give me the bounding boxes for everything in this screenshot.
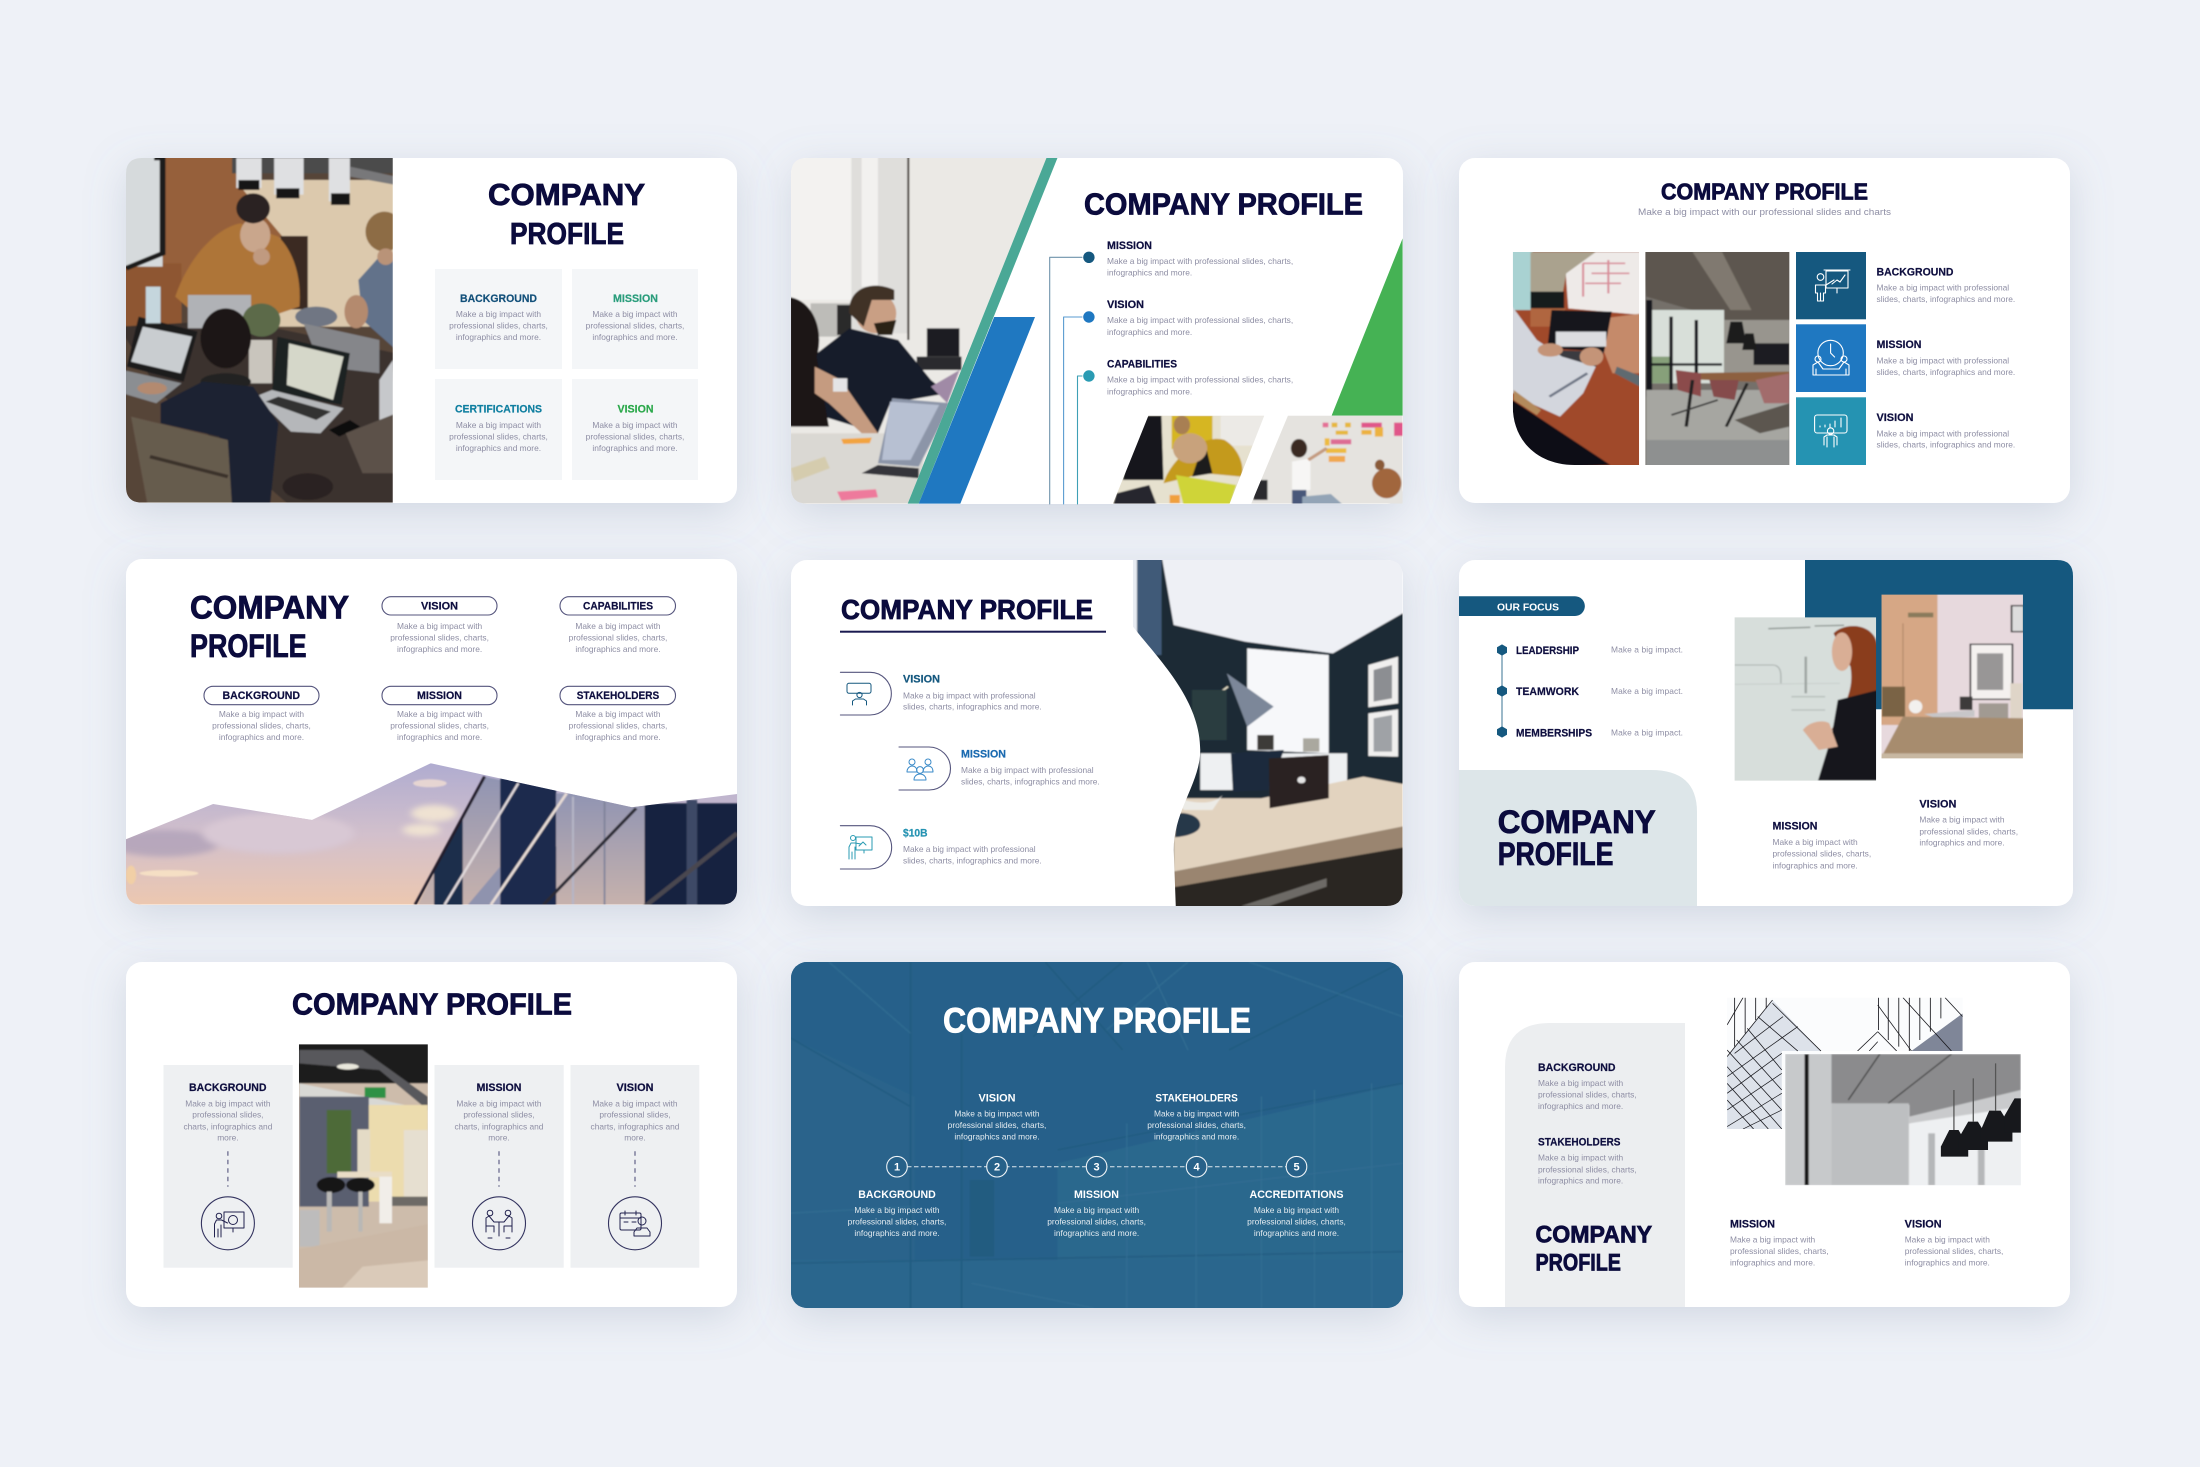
photo: laptop at whiteboard xyxy=(1512,252,1639,465)
item: vision: slides, charts, infographics and more. xyxy=(1876,440,2015,450)
title: PROFILE xyxy=(1536,1249,1621,1276)
photo: office lobby xyxy=(295,1040,432,1293)
title: PROFILE xyxy=(510,216,624,251)
item: vision xyxy=(948,1092,1046,1142)
title xyxy=(190,589,349,664)
item: vision: Make a big impact with xyxy=(1919,815,2005,825)
item: mission: Make a big impact with xyxy=(1054,1205,1140,1215)
box: vision: Make a big impact with xyxy=(592,420,678,430)
item: vision: VISION xyxy=(978,1092,1016,1104)
dashed timeline with numbered nodes: 3 xyxy=(1094,1162,1100,1174)
column: background: professional slides, xyxy=(192,1110,264,1120)
item: mission: Make a big impact with professional xyxy=(1876,355,2009,365)
photo: pendant lamps xyxy=(1781,1050,2025,1190)
column: background xyxy=(164,1065,293,1268)
item: stakeholders: Make a big impact with xyxy=(1538,1153,1624,1163)
box: background: BACKGROUND xyxy=(460,293,537,305)
item: mission: MISSION xyxy=(1074,1189,1119,1201)
item: accreditations: Make a big impact with xyxy=(1254,1205,1339,1215)
photo: woman at whiteboard xyxy=(1734,617,1876,781)
column: mission: charts, infographics and xyxy=(455,1121,544,1131)
item: mission xyxy=(1047,1189,1146,1238)
item: accreditations: infographics and more. xyxy=(1254,1228,1339,1238)
panel: slide 3 icon tiles xyxy=(1459,158,2070,503)
item: background: infographics and more. xyxy=(854,1228,940,1238)
pill: mission xyxy=(382,686,497,742)
photo: desk and poster xyxy=(1878,592,2027,762)
dashed timeline with numbered nodes: 4 xyxy=(1194,1162,1201,1174)
column: background: more. xyxy=(217,1133,239,1143)
title: PROFILE xyxy=(190,628,307,664)
timeline connectors and dots xyxy=(1050,252,1095,504)
item: vision: infographics and more. xyxy=(1919,838,2005,848)
box: certifications: CERTIFICATIONS xyxy=(455,404,542,416)
grey side panel xyxy=(1505,1023,1685,1307)
item: vision: VISION xyxy=(1876,412,1914,424)
pill: capabilities: professional slides, charts, xyxy=(569,633,667,643)
item: stakeholders: Make a big impact with xyxy=(1154,1109,1240,1119)
panel: slide 2 diagonal timeline xyxy=(784,153,1408,510)
item: stakeholders: STAKEHOLDERS xyxy=(1155,1092,1238,1104)
focus timeline: MEMBERSHIPS xyxy=(1516,727,1592,739)
item: vision: infographics and more. xyxy=(1905,1258,1990,1268)
box: certifications: professional slides, charts, xyxy=(449,432,548,442)
title xyxy=(1536,1222,1652,1276)
item: $10B with icon: slides, charts, infographics and more. xyxy=(903,856,1042,866)
pill: vision: Make a big impact with xyxy=(397,621,483,631)
box: certifications: infographics and more. xyxy=(456,443,541,453)
item: background: Make a big impact with professional xyxy=(1876,283,2009,293)
item: vision with icon xyxy=(840,672,1042,715)
column: vision: professional slides, xyxy=(599,1110,671,1120)
column: mission: MISSION xyxy=(476,1082,522,1094)
column: vision: Make a big impact with xyxy=(592,1098,678,1108)
photo and coloured diagonal shapes xyxy=(784,153,1408,510)
item: mission with icon xyxy=(899,747,1100,790)
pill: background: BACKGROUND xyxy=(222,690,300,702)
focus timeline: Make a big impact. xyxy=(1611,644,1683,654)
item: $10B with icon: Make a big impact with professional xyxy=(903,844,1036,854)
item: vision: VISION xyxy=(1919,798,1957,810)
column: background: charts, infographics and xyxy=(183,1121,273,1131)
item: mission with icon: slides, charts, infographics and more. xyxy=(961,776,1100,786)
light title panel xyxy=(1459,770,1697,906)
item: capabilities xyxy=(1107,359,1293,396)
focus timeline: Make a big impact. xyxy=(1611,686,1683,696)
pill: stakeholders: Make a big impact with xyxy=(575,709,661,719)
item: background: professional slides, charts, xyxy=(1538,1090,1637,1100)
item: background xyxy=(848,1189,946,1238)
box: mission: infographics and more. xyxy=(592,332,678,342)
pill: vision: infographics and more. xyxy=(397,644,482,654)
pill: vision: professional slides, charts, xyxy=(390,633,489,643)
background hall photo tint xyxy=(788,960,1408,1310)
focus timeline xyxy=(1497,644,1683,739)
tile: background icon xyxy=(1796,252,1866,319)
item: stakeholders: professional slides, charts, xyxy=(1147,1120,1246,1130)
focus timeline: Make a big impact. xyxy=(1611,727,1683,737)
pill: background: Make a big impact with xyxy=(219,709,304,719)
item: vision xyxy=(1876,412,2015,450)
item: background xyxy=(1876,266,2015,304)
panel: slide 8 blue timeline xyxy=(788,960,1408,1310)
our focus tab xyxy=(1459,596,1585,616)
column: background: BACKGROUND xyxy=(189,1082,267,1094)
item: mission: Make a big impact with xyxy=(1772,837,1858,847)
column: vision: more. xyxy=(624,1133,646,1143)
dark blue block xyxy=(1805,560,2073,709)
pill: mission: MISSION xyxy=(417,690,462,702)
title xyxy=(1498,804,1656,872)
item: accreditations xyxy=(1247,1189,1346,1238)
panel: slide 9 monochrome photos xyxy=(1459,962,2070,1307)
box: mission: Make a big impact with xyxy=(592,309,678,319)
item: mission xyxy=(1107,240,1293,278)
item: mission xyxy=(1876,339,2015,377)
item: mission xyxy=(1772,821,1871,870)
dashed timeline with numbered nodes: 1 xyxy=(894,1162,900,1174)
column: vision xyxy=(570,1065,699,1268)
box: background: Make a big impact with xyxy=(456,309,541,319)
item: background: Make a big impact with xyxy=(854,1205,940,1215)
item: background: infographics and more. xyxy=(1538,1101,1623,1111)
column: mission: more. xyxy=(488,1133,510,1143)
item: vision: VISION xyxy=(1107,299,1144,311)
item: mission: Make a big impact with xyxy=(1730,1235,1816,1245)
item: background: BACKGROUND xyxy=(858,1189,936,1201)
item: capabilities: infographics and more. xyxy=(1107,386,1192,396)
item: mission: professional slides, charts, xyxy=(1047,1217,1146,1227)
item: $10B with icon: $10B xyxy=(903,828,928,840)
photo: team at laptops xyxy=(118,153,403,507)
item: vision: Make a big impact with professional xyxy=(1876,428,2009,438)
photo: meeting room xyxy=(1645,252,1790,465)
pill: vision xyxy=(382,597,497,654)
pill: vision: VISION xyxy=(421,600,458,612)
pill: capabilities: infographics and more. xyxy=(575,644,661,654)
box: vision: VISION xyxy=(618,404,654,416)
item: mission: MISSION xyxy=(1876,339,1922,351)
box: certifications xyxy=(435,379,562,480)
item: vision: professional slides, charts, xyxy=(948,1120,1046,1130)
item: mission: MISSION xyxy=(1772,821,1818,833)
item: mission: infographics and more. xyxy=(1772,860,1858,870)
box: background xyxy=(435,269,562,369)
item: background: slides, charts, infographics and more. xyxy=(1876,294,2015,304)
item: mission: infographics and more. xyxy=(1054,1228,1139,1238)
title underline xyxy=(840,631,1106,633)
dashed timeline with numbered nodes xyxy=(887,1156,1307,1177)
box: vision: professional slides, charts, xyxy=(586,432,684,442)
title: PROFILE xyxy=(1498,836,1613,872)
title: COMPANY PROFILE xyxy=(1084,187,1363,222)
pill: capabilities: Make a big impact with xyxy=(575,621,661,631)
subtitle: Make a big impact with our professional slides and charts xyxy=(1638,207,1891,218)
column: background: Make a big impact with xyxy=(185,1098,271,1108)
item: vision: Make a big impact with xyxy=(1905,1235,1990,1245)
item: vision with icon: slides, charts, infographics and more. xyxy=(903,702,1042,712)
tile: mission icon xyxy=(1796,324,1866,392)
box: certifications: Make a big impact with xyxy=(456,420,541,430)
panel: slide 6 our focus xyxy=(1459,560,2073,906)
column: mission: Make a big impact with xyxy=(456,1098,542,1108)
pill: capabilities xyxy=(560,597,676,654)
title: COMPANY xyxy=(488,177,645,212)
item: background: BACKGROUND xyxy=(1538,1062,1616,1074)
item: accreditations: professional slides, charts, xyxy=(1247,1217,1346,1227)
item: background: Make a big impact with xyxy=(1538,1078,1624,1088)
photo: glass building at sunset xyxy=(110,760,746,910)
our focus tab: OUR FOCUS xyxy=(1497,602,1559,613)
item: mission with icon: Make a big impact with professional xyxy=(961,765,1094,775)
column: vision: charts, infographics and xyxy=(591,1121,680,1131)
pill: stakeholders: infographics and more. xyxy=(575,732,661,742)
focus timeline: TEAMWORK xyxy=(1516,686,1579,698)
item: mission with icon: MISSION xyxy=(961,749,1006,761)
box: mission xyxy=(572,269,698,369)
title xyxy=(488,177,645,251)
dashed timeline with numbered nodes: 5 xyxy=(1293,1162,1300,1174)
item: stakeholders: infographics and more. xyxy=(1154,1132,1239,1142)
item: vision: professional slides, charts, xyxy=(1905,1246,2003,1256)
item: mission: professional slides, charts, xyxy=(1772,849,1871,859)
item: background xyxy=(1538,1062,1637,1111)
item: mission: infographics and more. xyxy=(1107,268,1192,278)
item: background: BACKGROUND xyxy=(1876,266,1954,278)
tile: vision icon xyxy=(1796,397,1866,465)
pill: mission: Make a big impact with xyxy=(397,709,483,719)
pill: background xyxy=(204,686,319,742)
item: capabilities: Make a big impact with professional slides, charts, xyxy=(1107,375,1293,385)
column: mission xyxy=(434,1065,564,1268)
box: mission: professional slides, charts, xyxy=(586,320,684,330)
focus timeline: LEADERSHIP xyxy=(1516,645,1579,657)
item: mission: slides, charts, infographics and more. xyxy=(1876,367,2015,377)
panel: slide 5 curved photo with icons xyxy=(791,555,1408,912)
item: mission: MISSION xyxy=(1107,240,1152,252)
box: background: professional slides, charts, xyxy=(449,320,548,330)
pill: stakeholders: professional slides, charts, xyxy=(569,721,667,731)
pill: mission: professional slides, charts, xyxy=(390,721,489,731)
photo: glass towers xyxy=(1727,998,1963,1129)
pill: capabilities: CAPABILITIES xyxy=(583,600,653,612)
pill: mission: infographics and more. xyxy=(397,732,482,742)
item: vision: professional slides, charts, xyxy=(1919,826,2018,836)
item: vision: VISION xyxy=(1905,1218,1942,1230)
item: stakeholders: STAKEHOLDERS xyxy=(1538,1137,1620,1149)
item: stakeholders: professional slides, charts, xyxy=(1538,1164,1637,1174)
item: vision: Make a big impact with xyxy=(954,1109,1040,1119)
title: COMPANY xyxy=(1498,804,1656,840)
item: stakeholders: infographics and more. xyxy=(1538,1176,1623,1186)
item: vision: infographics and more. xyxy=(1107,327,1192,337)
item: mission: professional slides, charts, xyxy=(1730,1246,1829,1256)
item: vision xyxy=(1905,1218,2003,1268)
title: COMPANY PROFILE xyxy=(841,594,1093,625)
photo: dark home office xyxy=(1127,555,1408,912)
title: COMPANY PROFILE xyxy=(292,986,572,1021)
item: mission: MISSION xyxy=(1730,1218,1775,1230)
panel: slide 4 pills and skyline xyxy=(110,559,746,910)
pill: background: infographics and more. xyxy=(219,732,304,742)
item: vision: Make a big impact with professional slides, charts, xyxy=(1107,315,1293,325)
item: accreditations: ACCREDITATIONS xyxy=(1250,1189,1344,1201)
box: background: infographics and more. xyxy=(456,332,541,342)
box: mission: MISSION xyxy=(613,293,658,305)
item: vision with icon: VISION xyxy=(903,674,940,686)
pill: stakeholders xyxy=(560,686,676,742)
box: vision: infographics and more. xyxy=(592,443,678,453)
item: mission: infographics and more. xyxy=(1730,1258,1815,1268)
item: stakeholders xyxy=(1147,1092,1246,1142)
pill: background: professional slides, charts, xyxy=(212,721,311,731)
column: vision: VISION xyxy=(616,1082,654,1094)
column: mission: professional slides, xyxy=(463,1110,535,1120)
item: stakeholders xyxy=(1538,1137,1637,1186)
title: COMPANY PROFILE xyxy=(943,1002,1251,1041)
box: vision xyxy=(572,379,698,480)
item: capabilities: CAPABILITIES xyxy=(1107,359,1177,371)
item: vision with icon: Make a big impact with professional xyxy=(903,690,1036,700)
item: mission: Make a big impact with professional slides, charts, xyxy=(1107,256,1293,266)
item: mission xyxy=(1730,1218,1829,1268)
item: background: professional slides, charts, xyxy=(848,1217,946,1227)
panel: slide 1 four boxes xyxy=(118,153,737,507)
item: vision: infographics and more. xyxy=(954,1132,1040,1142)
item: $10B with icon xyxy=(840,826,1042,869)
item: vision xyxy=(1107,299,1293,337)
title: COMPANY xyxy=(190,589,349,625)
pill: stakeholders: STAKEHOLDERS xyxy=(577,690,659,702)
item: vision xyxy=(1919,798,2018,848)
dashed timeline with numbered nodes: 2 xyxy=(994,1162,1000,1174)
panel: slide 7 columns xyxy=(126,962,737,1307)
title: COMPANY PROFILE xyxy=(1661,178,1868,204)
title: COMPANY xyxy=(1536,1222,1652,1249)
